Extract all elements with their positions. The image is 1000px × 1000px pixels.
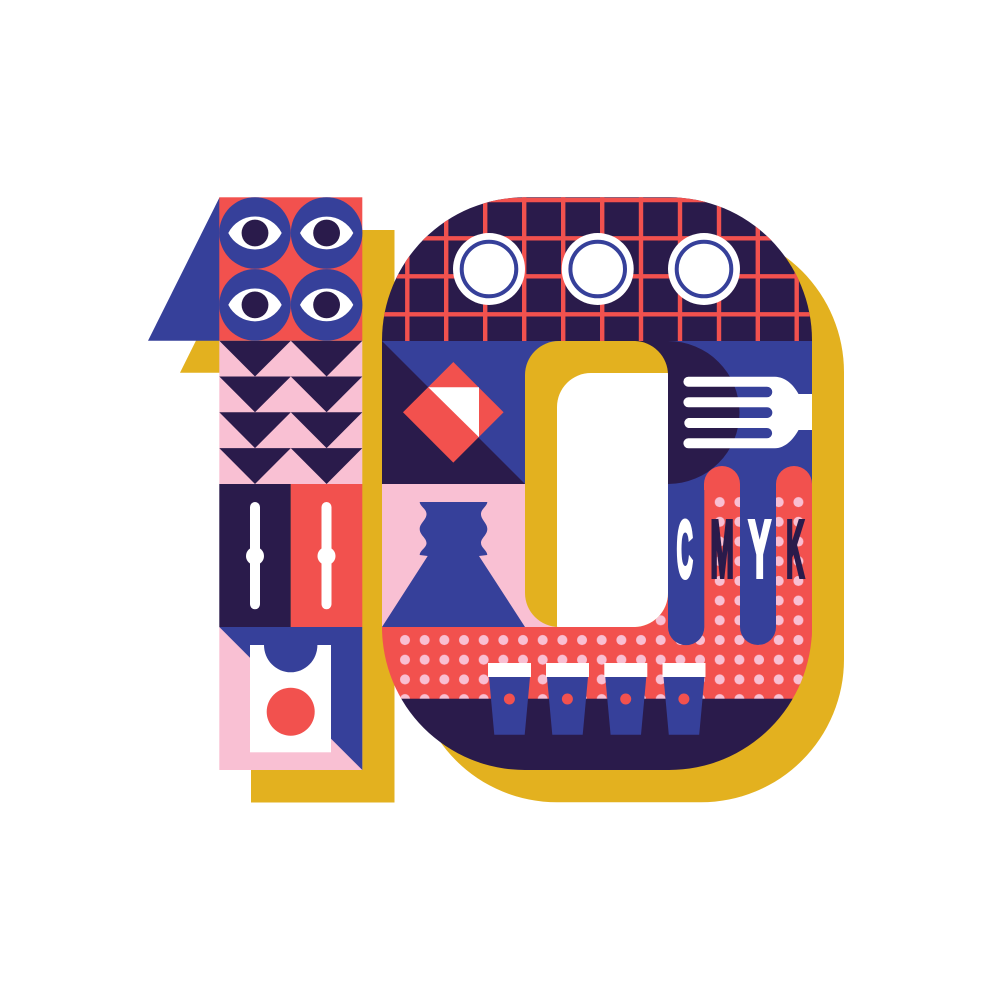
letter K: K	[786, 504, 804, 594]
cup 2	[546, 663, 589, 735]
letter C: C	[677, 506, 693, 594]
cup 1	[488, 663, 531, 735]
dark base band	[382, 699, 812, 771]
panel: pink block	[382, 484, 557, 627]
dark half circle	[668, 341, 740, 484]
panel: triangles pattern	[219, 341, 362, 484]
dark corner behind hole	[636, 341, 668, 373]
panel: red dotted band	[382, 466, 812, 700]
CMYK wordmark	[677, 504, 804, 594]
panel: tablecloth grid	[382, 197, 812, 341]
plate 2	[562, 233, 634, 305]
panel: diamond block	[382, 341, 525, 484]
cup 3	[604, 663, 647, 735]
digit one	[148, 197, 362, 770]
cup 4	[662, 663, 706, 735]
panel: four eyes	[219, 197, 362, 341]
letter Y: Y	[749, 505, 771, 594]
blue triangle flag	[148, 197, 220, 341]
icon: bottle	[382, 502, 525, 627]
gold shadow of digit zero	[414, 229, 844, 802]
blue pills	[668, 490, 776, 645]
gold shadow of digit one	[180, 230, 394, 802]
white hole of zero with gold shadow	[525, 341, 668, 627]
plate 1	[453, 233, 525, 305]
cups	[488, 663, 706, 735]
panel: blue fork background	[668, 341, 812, 501]
plate 3	[668, 233, 740, 305]
icon: fork	[683, 377, 812, 448]
letter M: M	[711, 504, 734, 594]
digit zero	[382, 197, 812, 771]
panel: card with red circle	[219, 627, 362, 770]
plates	[453, 233, 740, 305]
blue corner behind hole	[525, 341, 558, 374]
panel: sliders	[219, 484, 362, 627]
